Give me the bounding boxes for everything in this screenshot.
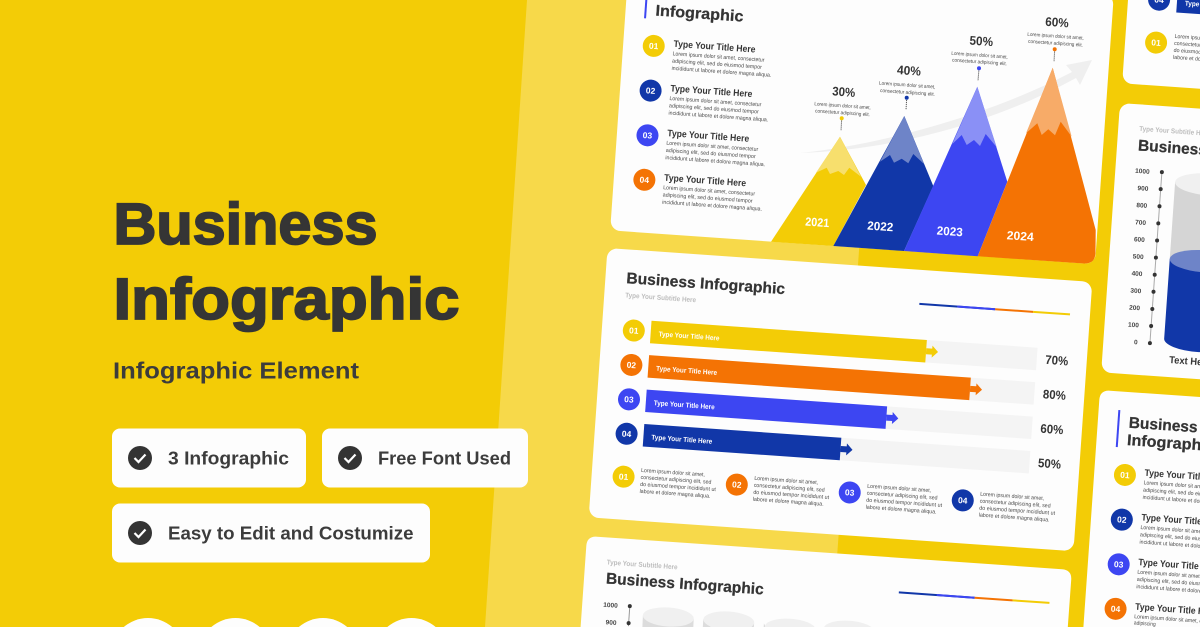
list item 04: 04 — [1111, 604, 1121, 614]
bar row 02: 80%: Type Your Title Here — [656, 366, 717, 377]
bar row 03: 60% — [617, 388, 1064, 441]
slide content — [1103, 410, 1200, 627]
colour rule — [919, 303, 1070, 315]
callout 40%: 40% — [896, 63, 921, 79]
note 04: labore et dolore magna aliqua. — [979, 513, 1050, 524]
list item 01: Lorem ipsum dolor sit amet, consectetur — [672, 51, 765, 64]
heading: Infographic — [655, 2, 744, 26]
accent bar — [644, 0, 649, 18]
list item 01: 01 — [649, 41, 659, 51]
mountain 2023: 2023 — [936, 224, 964, 239]
list item 01 — [641, 34, 774, 79]
list item 03: 03 — [1114, 559, 1124, 570]
bar row 04: 50%: Type Your Title Here — [651, 435, 713, 446]
note 02: do eiusmod tempor incididunt ut — [753, 490, 830, 501]
callout 50%: consectetur adipiscing elit. — [952, 58, 1007, 67]
note 02: labore et dolore magna aliqua. — [753, 497, 824, 508]
list item 01 — [1112, 463, 1200, 508]
list item 03: 03 — [642, 130, 653, 141]
slide heading block: Type Your Subtitle Here — [606, 559, 678, 571]
note 01 — [611, 465, 718, 500]
note 02: Lorem ipsum dolor sit amet, — [754, 476, 819, 486]
panel: top slide with list — [610, 0, 1114, 264]
axis: 800 — [1136, 202, 1148, 210]
panel: right list slide — [1083, 391, 1200, 627]
main title: Infographic — [114, 267, 460, 332]
list item 03: incididunt ut labore et dolore magna aliqua. — [665, 155, 766, 168]
panel: progress bars slide — [589, 248, 1092, 551]
note 03 — [838, 481, 944, 516]
list item 02: 02 — [1117, 514, 1127, 525]
callout 50% — [951, 34, 1008, 81]
callout 50%: 50% — [969, 34, 994, 49]
note 03: 03 — [845, 487, 855, 498]
main title — [114, 192, 460, 332]
subheading: Type Your Subtitle Here — [625, 292, 696, 304]
list item 02 — [638, 79, 771, 124]
mountain 2024: 2024 — [1006, 228, 1035, 244]
note 04: consectetur adipiscing elit, sed — [980, 499, 1051, 510]
feature chip: 3 Infographic: 3 Infographic — [168, 448, 289, 468]
bar row 03: 60%: 03 — [624, 394, 634, 405]
axis: 400 — [1131, 270, 1143, 278]
callout 60%: 60% — [1045, 15, 1069, 30]
list item 04 — [632, 168, 765, 213]
bar row 04: 50%: 50% — [1038, 456, 1061, 472]
cylinders — [642, 606, 871, 627]
cylinder column — [1163, 171, 1200, 354]
bar row 04 — [1147, 0, 1200, 26]
slide heading block: 900 — [605, 619, 617, 627]
axis: 300 — [1130, 287, 1142, 295]
growth arrow — [800, 60, 1092, 153]
list item 02: Type Your Title Here — [670, 83, 753, 100]
feature chip: Easy to Edit and Costumize — [112, 504, 430, 562]
note 01: 01 — [619, 471, 629, 482]
callout 50%: Lorem ipsum dolor sit amet, — [951, 51, 1008, 61]
list item 02: 02 — [646, 85, 656, 96]
panel: top right bars slide — [1122, 0, 1200, 117]
list item 02: incididunt ut labore et dolore magna aliqua. — [668, 111, 769, 124]
callout 30% — [814, 84, 871, 131]
list item 04: incididunt ut labore et dolore magna aliqua. — [662, 200, 763, 213]
note 04: do eiusmod tempor incididunt ut — [979, 506, 1056, 517]
list item 02 — [1109, 508, 1200, 553]
axis: 600 — [1134, 236, 1145, 244]
mountain 2023 — [904, 87, 1007, 256]
app icon circles — [124, 618, 436, 627]
list item 01: incididunt ut labore et dolore magna aliqua. — [671, 66, 772, 79]
slide heading block — [602, 559, 1050, 627]
list item 03: Lorem ipsum dolor sit amet, consectetur — [666, 141, 758, 153]
mountain 2022: 2022 — [867, 219, 894, 234]
slide content: Business — [1128, 415, 1198, 436]
callout 60%: Lorem ipsum dolor sit amet, — [1027, 32, 1084, 42]
list item 03 — [1106, 553, 1200, 597]
axis: 200 — [1129, 305, 1141, 312]
note 01: do eiusmod tempor incididunt ut — [640, 482, 717, 493]
note 01: consectetur adipiscing elit, sed — [640, 475, 712, 486]
note 03: do eiusmod tempor incididunt ut — [866, 498, 943, 509]
list item 04: adipiscing elit, sed do eiusmod tempor — [663, 192, 753, 205]
callout 30%: consectetur adipiscing elit. — [815, 108, 870, 118]
feature chip: 3 Infographic — [112, 428, 306, 488]
axis: 1000 — [1135, 168, 1150, 176]
callout 60% — [1027, 15, 1084, 62]
callout 40% — [879, 63, 936, 110]
list item 02: adipiscing elit, sed do eiusmod tempor — [669, 103, 759, 116]
axis: 900 — [1137, 185, 1149, 193]
note 03: Lorem ipsum dolor sit amet, — [867, 484, 932, 494]
callout 30%: 30% — [832, 84, 856, 100]
feature chip: Free Font Used: Free Font Used — [378, 448, 511, 468]
slide heading block: 1000 — [603, 602, 618, 610]
panel: right cylinder slide — [1101, 103, 1200, 406]
note 02: consectetur adipiscing elit, sed — [754, 483, 825, 494]
note 01 — [1144, 31, 1200, 66]
bar row 01: 70% — [622, 319, 1069, 372]
axis: 500 — [1132, 253, 1144, 261]
list item 01: 01 — [1120, 470, 1130, 480]
list item 04: Type Your Title Here — [664, 173, 746, 189]
bar row 02: 80%: 02 — [626, 360, 637, 370]
note 01: Lorem ipsum dolor sit amet, — [641, 468, 706, 478]
note 01: labore et dolore magna aliqua. — [639, 489, 711, 500]
list item 01: Type Your Title Here — [673, 39, 756, 56]
note 02 — [725, 473, 831, 508]
note 02: 02 — [732, 479, 742, 490]
subtitle: Infographic Element — [113, 358, 359, 384]
bar row 04: 50%: 04 — [622, 428, 632, 439]
mountain 2024 — [978, 68, 1096, 264]
callout 40%: consectetur adipiscing elit. — [880, 88, 935, 98]
note 04: 04 — [958, 495, 968, 506]
note 03: consectetur adipiscing elit, sed — [866, 491, 938, 502]
list item 03: Type Your Title Here — [667, 128, 750, 145]
mountain 2021: 2021 — [805, 215, 830, 230]
list item 04: 04 — [639, 174, 650, 185]
callout 30%: Lorem ipsum dolor sit amet, — [814, 101, 871, 111]
feature chip: Easy to Edit and Costumize: Easy to Edit and Costumize — [168, 524, 414, 544]
bar row 02: 80%: 80% — [1042, 387, 1066, 403]
axis: 700 — [1135, 219, 1147, 227]
main title: Business — [114, 192, 378, 257]
axis: 0 — [1134, 339, 1138, 346]
list item 02: Lorem ipsum dolor sit amet, consectetur — [669, 96, 762, 108]
heading: Business Infographic — [626, 270, 786, 298]
callout 40%: Lorem ipsum dolor sit amet, — [879, 81, 936, 91]
list item 03: adipiscing elit, sed do eiusmod tempor — [666, 148, 756, 160]
bar row 01: 70%: 70% — [1045, 353, 1069, 368]
list item 04 — [1103, 597, 1200, 627]
mountain 2021 — [771, 137, 866, 246]
note 04: Lorem ipsum dolor sit amet, — [980, 492, 1045, 502]
axis: 100 — [1128, 322, 1139, 329]
bar row 01: 70%: 01 — [629, 325, 639, 336]
bar row 03: 60%: Type Your Title Here — [654, 400, 715, 411]
bar row 02: 80% — [620, 353, 1067, 407]
note 03: labore et dolore magna aliqua. — [866, 505, 937, 516]
bar row 04: 50% — [615, 422, 1062, 476]
slide heading block: Business Infographic — [605, 570, 765, 598]
axis — [1123, 168, 1164, 347]
list item 01: adipiscing elit, sed do eiusmod tempor — [672, 59, 762, 71]
callout 60%: consectetur adipiscing elit. — [1028, 39, 1083, 49]
note 04 — [951, 489, 1057, 524]
bar row 01: 70%: Type Your Title Here — [658, 331, 720, 343]
feature chip: Free Font Used — [322, 428, 528, 488]
bar row 03: 60%: 60% — [1040, 422, 1064, 437]
mountain 2022 — [833, 116, 933, 251]
panel: cylinder chart slide, bottom — [581, 537, 1071, 627]
list item 03 — [635, 124, 768, 168]
list item 04: Lorem ipsum dolor sit amet, consectetur — [663, 185, 755, 198]
note 01: 01 — [1151, 37, 1161, 48]
